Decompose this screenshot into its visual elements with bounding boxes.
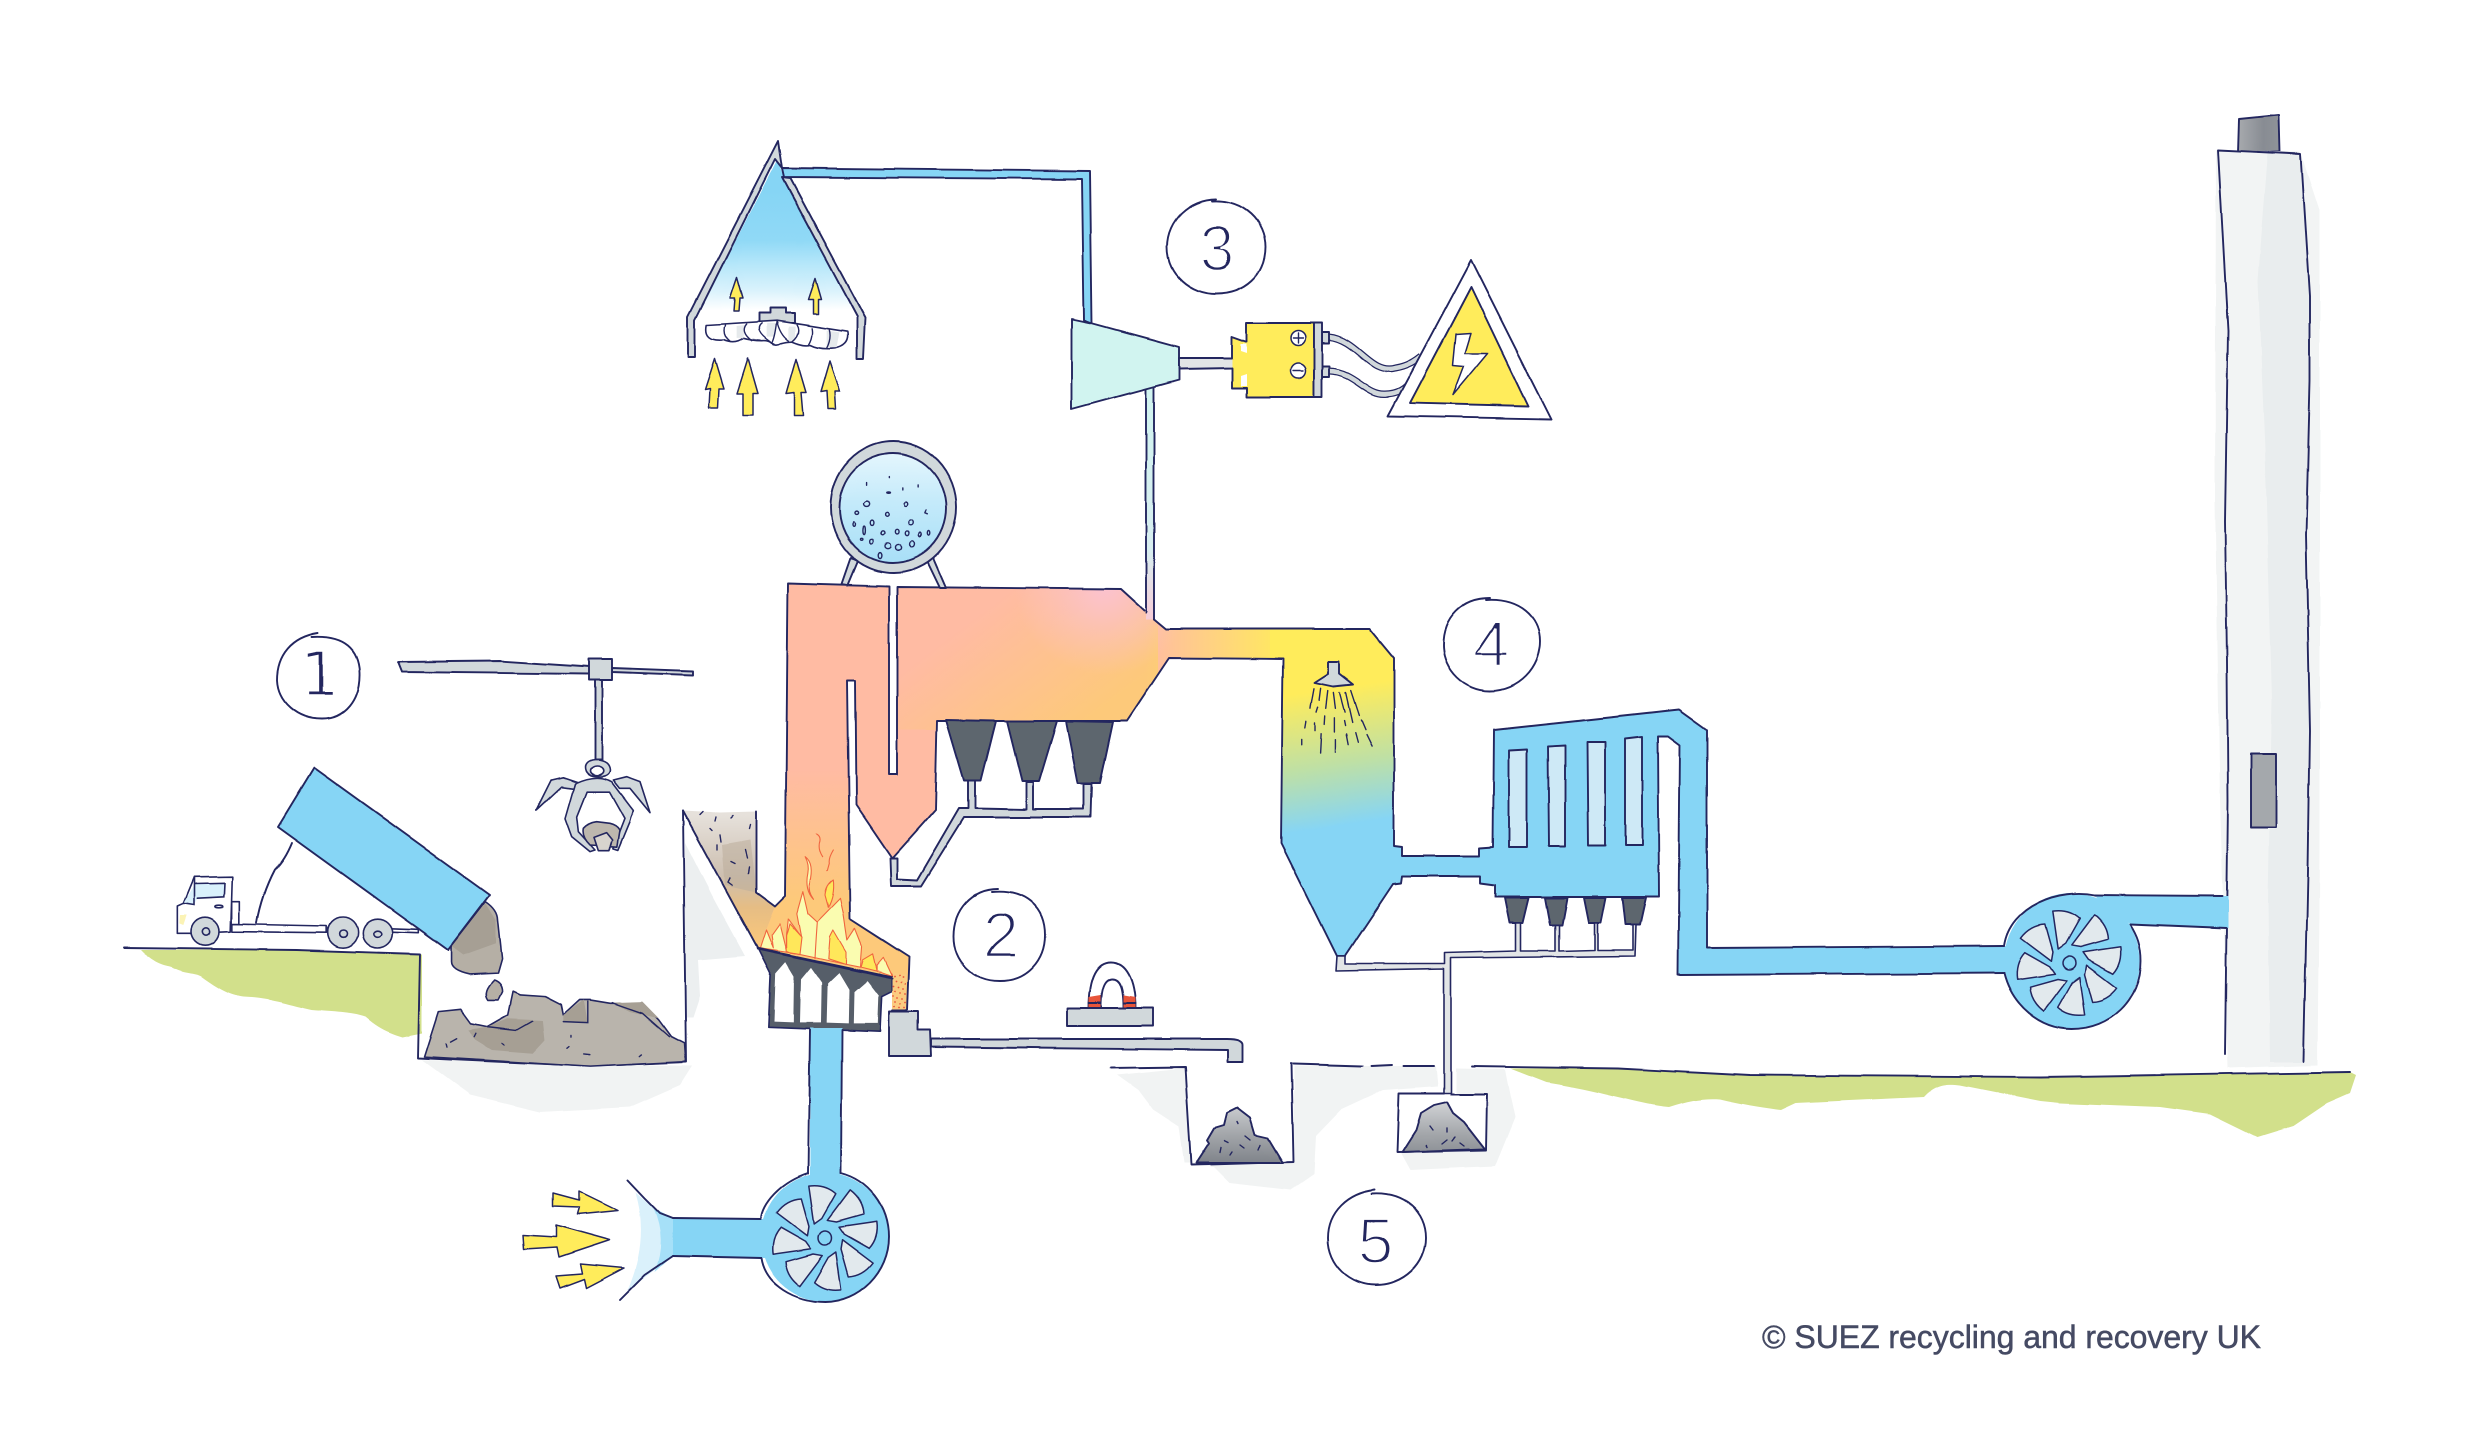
- falling waste: [451, 902, 502, 974]
- return pipe to boiler: [1146, 385, 1154, 619]
- dome walls: [688, 141, 782, 357]
- boiler gradient fill: [759, 584, 1402, 984]
- step 3 number: [1167, 199, 1266, 294]
- crane trolley: [589, 659, 612, 680]
- boiler: [750, 570, 1450, 1032]
- waste pile: [425, 992, 686, 1067]
- air intake: [523, 1180, 673, 1299]
- filter hoppers: [1505, 898, 1646, 925]
- fly ash pile: [1402, 1102, 1485, 1152]
- fan blades: [2017, 911, 2121, 1015]
- yellow air arrows: [523, 1191, 624, 1288]
- turbine: [1072, 319, 1179, 409]
- drum legs: [842, 558, 946, 588]
- dump truck: [177, 768, 490, 950]
- grey ground shadows: [422, 842, 1515, 1190]
- bunker crane: [398, 659, 692, 852]
- large air arrows: [705, 358, 840, 416]
- step 5 number: 5: [1358, 1205, 1394, 1277]
- magnet: [1068, 962, 1153, 1026]
- lightning bolt: [1453, 333, 1488, 395]
- step 4 number: [1443, 598, 1540, 691]
- primary air ducts: [673, 1028, 842, 1258]
- step 2 number: [954, 889, 1045, 981]
- boiler ash pipes: [890, 781, 1092, 886]
- waste in bunker: [425, 902, 686, 1067]
- step 3 number: 3: [1199, 212, 1235, 284]
- generator wires: [1329, 337, 1421, 369]
- truck body: [177, 877, 418, 948]
- ash discharge box: [889, 1012, 931, 1056]
- step 4 number: 4: [1473, 608, 1509, 680]
- green ground areas: [141, 950, 2356, 1137]
- conveyor: [931, 1039, 1243, 1062]
- generator body: [1232, 323, 1314, 397]
- flames: [760, 834, 892, 976]
- chimney body: [2215, 150, 2320, 1068]
- plus terminal: [1290, 330, 1306, 346]
- generator: [1232, 323, 1421, 397]
- chimney cap: [2238, 115, 2280, 152]
- crane cable: [595, 680, 602, 760]
- small rising arrows: [730, 277, 821, 314]
- minus terminal: [1290, 364, 1306, 378]
- condenser fan blades: [706, 321, 848, 349]
- bag filter and stack duct: [1400, 710, 2010, 975]
- generator end plate: [1314, 323, 1322, 397]
- drum water: [840, 453, 946, 563]
- intake flare: [628, 1192, 673, 1290]
- generator terminals: [1322, 332, 1329, 343]
- filter bags: [1509, 737, 1642, 847]
- boiler outline: [758, 583, 1402, 1011]
- bottom ash chute: [892, 972, 907, 1011]
- fan blades: [773, 1186, 877, 1290]
- induced draft fan: [2004, 893, 2228, 1029]
- steam dome condenser: [688, 141, 865, 416]
- steam drum: [830, 441, 956, 588]
- fan housing: [2004, 893, 2140, 1029]
- step 5 number: [1328, 1190, 1426, 1285]
- grate: [758, 948, 892, 1032]
- quench shower: [1302, 662, 1372, 753]
- turbine shaft: [1179, 358, 1233, 369]
- copyright text: © SUEZ recycling and recovery UK: [1762, 1319, 2261, 1355]
- waste hopper: [683, 811, 790, 950]
- step 1 number: 1: [300, 638, 340, 711]
- fan housing: [761, 1172, 889, 1302]
- grab claw: [537, 760, 650, 852]
- process illustration: [124, 115, 2356, 1302]
- hopper fill: [683, 811, 790, 950]
- electricity warning sign: [1388, 260, 1551, 419]
- dome steam fill: [699, 160, 853, 312]
- fly ash box: [1397, 1093, 1487, 1152]
- fly ash pipes: [1336, 923, 1636, 1152]
- crane rail: [398, 661, 692, 675]
- condenser fan head: [759, 308, 794, 323]
- furnace hoppers: [946, 720, 1113, 783]
- bottom ash pile: [1196, 1108, 1283, 1163]
- truck ram: [257, 843, 292, 923]
- chimney door: [2251, 754, 2276, 827]
- bottom ash conveyor: [889, 962, 1243, 1062]
- steam pipe to turbine: [782, 168, 1092, 323]
- primary air fan: [673, 1028, 889, 1302]
- fan duct to chimney: [2095, 896, 2228, 928]
- step 2 number: 2: [983, 899, 1019, 971]
- truck tipper: [278, 768, 490, 950]
- drum ring: [830, 441, 956, 573]
- drum bubbles: [853, 477, 930, 559]
- hopper outline: [683, 811, 775, 949]
- water spray: [1302, 689, 1372, 753]
- chimney: [2215, 115, 2320, 1068]
- step 1 number: [277, 633, 360, 719]
- ground line: [124, 811, 2350, 1165]
